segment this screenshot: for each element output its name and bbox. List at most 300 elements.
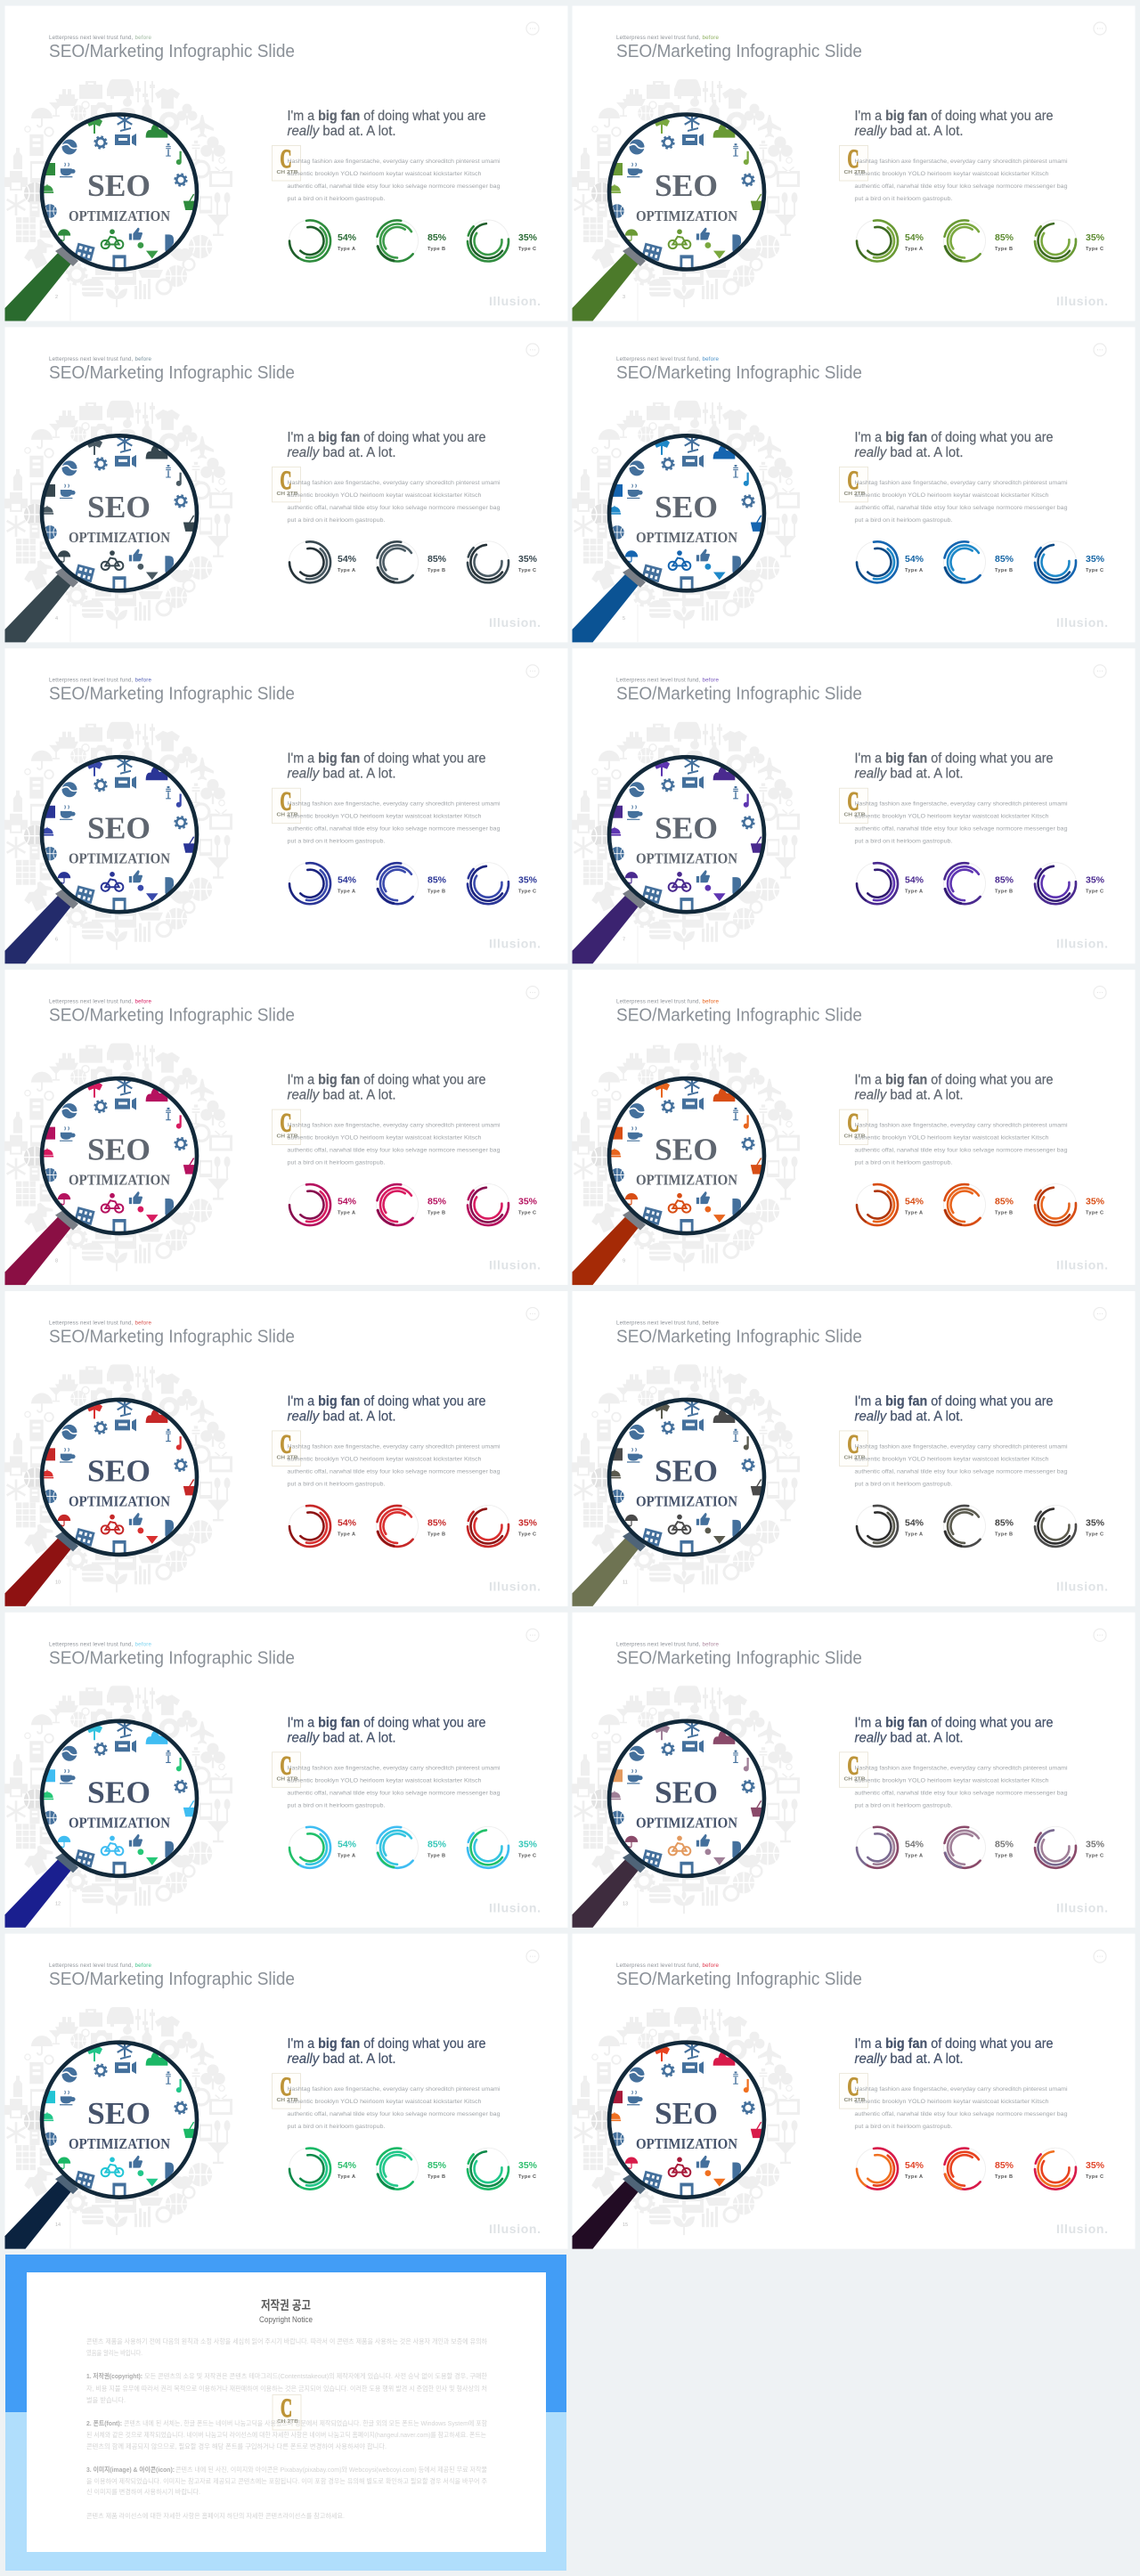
chart C bbox=[463, 537, 513, 588]
chart C bbox=[1030, 1501, 1080, 1551]
body copy: put a bird on it heirloom gastropub. bbox=[287, 196, 386, 202]
body copy bbox=[855, 1123, 1068, 1166]
body copy: authentic brooklyn YOLO heirloom keytar waistcoat kickstarter Kitsch bbox=[855, 1777, 1049, 1784]
label C: Type C bbox=[1086, 568, 1103, 573]
value A: 54% bbox=[905, 1517, 924, 1528]
title: SEO/Marketing Infographic Slide bbox=[616, 1969, 862, 1989]
chart C bbox=[1030, 215, 1080, 266]
value B: 85% bbox=[995, 1517, 1014, 1528]
background icon ring bbox=[572, 401, 800, 642]
slide panel bbox=[5, 1934, 568, 2249]
brand: Illusion. bbox=[489, 1900, 541, 1914]
heading: I'm a big fan of doing what you are bbox=[855, 1715, 1053, 1730]
body copy: put a bird on it heirloom gastropub. bbox=[287, 1481, 386, 1487]
body copy: Hashtag fashion axe fingerstache, everyday carry shoreditch pinterest umami bbox=[855, 801, 1067, 808]
menu icon bbox=[1094, 665, 1106, 678]
optimization wordmark: OPTIMIZATION bbox=[69, 1492, 170, 1509]
title: SEO/Marketing Infographic Slide bbox=[49, 1005, 295, 1026]
eyebrow: Letterpress next level trust fund, before bbox=[49, 35, 152, 41]
label A: Type A bbox=[338, 568, 355, 573]
title: SEO/Marketing Infographic Slide bbox=[616, 1326, 862, 1346]
eyebrow: Letterpress next level trust fund, before bbox=[49, 1962, 152, 1969]
title: SEO/Marketing Infographic Slide bbox=[616, 684, 862, 704]
heading line 2: really bad at. A lot. bbox=[287, 767, 395, 782]
page number: 14 bbox=[55, 2223, 61, 2228]
SEO wordmark: SEO bbox=[87, 1453, 151, 1488]
chart A bbox=[281, 1819, 338, 1876]
page number: 4 bbox=[55, 616, 58, 622]
image paragraph: 신 이미지를 변경하여 사용하시기 바랍니다. bbox=[86, 2487, 200, 2496]
magnifying glass bbox=[5, 2040, 197, 2249]
intro paragraph: 콘텐츠 제품을 사용하기 전에 다음의 원칙과 소정 사항을 세심히 읽어 주시기 바랍니다. 따라서 이 콘텐츠 제품을 사용하는 것은 사용자 개인과 보증에 유의하 bbox=[86, 2336, 487, 2345]
slide 11: cyan and green bbox=[4, 1613, 568, 1928]
page number: 8 bbox=[55, 1259, 58, 1264]
body copy bbox=[287, 480, 501, 524]
value C: 35% bbox=[518, 2160, 538, 2171]
notice title: 저작권 공고 bbox=[261, 2298, 311, 2312]
label A: Type A bbox=[905, 1532, 923, 1537]
eyebrow: Letterpress next level trust fund, before bbox=[49, 1641, 152, 1647]
slide panel bbox=[5, 327, 568, 642]
brand: Illusion. bbox=[1056, 2222, 1108, 2236]
menu icon bbox=[1094, 987, 1106, 999]
magnifying glass bbox=[5, 1397, 197, 1606]
heading: I'm a big fan of doing what you are bbox=[855, 2036, 1053, 2052]
chart A bbox=[849, 2141, 906, 2198]
optimization wordmark: OPTIMIZATION bbox=[69, 1172, 170, 1189]
chart A bbox=[849, 1498, 906, 1555]
body copy: put a bird on it heirloom gastropub. bbox=[287, 517, 386, 524]
label A: Type A bbox=[338, 247, 355, 252]
optimization wordmark: OPTIMIZATION bbox=[69, 1814, 170, 1831]
body copy bbox=[855, 2086, 1068, 2130]
chart C bbox=[1030, 1823, 1080, 1873]
value B: 85% bbox=[995, 2160, 1014, 2171]
heading line 2: really bad at. A lot. bbox=[855, 1730, 964, 1745]
magnifying glass bbox=[572, 1719, 764, 1928]
SEO wordmark: SEO bbox=[87, 1133, 151, 1167]
SEO wordmark: SEO bbox=[655, 2096, 718, 2131]
menu icon bbox=[526, 1629, 539, 1641]
value C: 35% bbox=[1086, 554, 1105, 565]
eyebrow: Letterpress next level trust fund, before bbox=[49, 678, 152, 684]
brand: Illusion. bbox=[489, 2222, 541, 2236]
value C: 35% bbox=[518, 1517, 538, 1528]
value B: 85% bbox=[428, 232, 447, 243]
label A: Type A bbox=[905, 247, 923, 252]
chart B bbox=[369, 533, 426, 591]
closing line: 콘텐츠 제품 라이선스에 대한 자세한 사항은 홈페이지 하단의 자세한 콘텐츠라이선스를 참고하세요. bbox=[86, 2511, 345, 2520]
magnifying glass bbox=[572, 1397, 764, 1606]
magnifying glass bbox=[572, 111, 764, 321]
label C: Type C bbox=[518, 247, 536, 252]
body copy: authentic brooklyn YOLO heirloom keytar waistcoat kickstarter Kitsch bbox=[855, 1135, 1049, 1142]
watermark bbox=[839, 1429, 867, 1466]
background icon ring bbox=[4, 1686, 232, 1927]
chart A bbox=[849, 1819, 906, 1876]
slide 12: mauve bbox=[572, 1613, 1135, 1928]
menu icon bbox=[1094, 344, 1106, 356]
label C: Type C bbox=[518, 2174, 536, 2180]
label C: Type C bbox=[518, 1853, 536, 1858]
background icon ring bbox=[4, 401, 232, 642]
chart A bbox=[849, 533, 906, 590]
title: SEO/Marketing Infographic Slide bbox=[49, 362, 295, 383]
chart B bbox=[936, 533, 993, 591]
menu icon bbox=[526, 1950, 539, 1962]
label C: Type C bbox=[1086, 890, 1103, 895]
value A: 54% bbox=[905, 232, 924, 243]
value C: 35% bbox=[1086, 232, 1105, 243]
image paragraph: 을 이용하여 제작되었습니다. 이미지는 참고자료 제공되고 콘텐츠에는 포함됩니다. 이미 포함 경우는 유의해 별도로 확인하고 필요할 경우 서식을 바꾸어 주 bbox=[86, 2476, 487, 2485]
font paragraph: 된 서체와 같은 것으로 제작되었습니다. 네이버 나눔고딕 라이선스에 대한 자세한 사항은 네이버 나눔고딕 홈페이지(hangeul.naver.com)를 참고하세요. 폰트는 bbox=[86, 2430, 486, 2439]
chart B bbox=[369, 1176, 426, 1233]
heading line 2: really bad at. A lot. bbox=[855, 767, 964, 782]
value B: 85% bbox=[995, 232, 1014, 243]
SEO wordmark: SEO bbox=[655, 490, 718, 524]
heading line 2: really bad at. A lot. bbox=[855, 124, 964, 139]
menu icon bbox=[1094, 1950, 1106, 1962]
brand: Illusion. bbox=[489, 294, 541, 308]
eyebrow: Letterpress next level trust fund, before bbox=[616, 678, 720, 684]
font paragraph bbox=[86, 2418, 487, 2450]
label C: Type C bbox=[518, 1532, 536, 1537]
slide 5: navy bbox=[4, 648, 568, 963]
value C: 35% bbox=[518, 554, 538, 565]
SEO wordmark: SEO bbox=[655, 1453, 718, 1488]
SEO wordmark: SEO bbox=[655, 168, 718, 203]
optimization wordmark: OPTIMIZATION bbox=[636, 1814, 737, 1831]
page number: 5 bbox=[623, 616, 625, 622]
notice subtitle: Copyright Notice bbox=[259, 2315, 313, 2325]
chart A bbox=[281, 1498, 338, 1555]
heading line 2: really bad at. A lot. bbox=[287, 1088, 395, 1103]
background icon ring bbox=[4, 1044, 232, 1285]
body copy: put a bird on it heirloom gastropub. bbox=[855, 517, 953, 524]
watermark bbox=[273, 1429, 301, 1466]
menu icon bbox=[526, 344, 539, 356]
value B: 85% bbox=[995, 1839, 1014, 1849]
value C: 35% bbox=[1086, 1197, 1105, 1207]
magnifying glass bbox=[5, 754, 197, 963]
label B: Type B bbox=[995, 2174, 1013, 2180]
magnifying glass bbox=[572, 754, 764, 963]
chart C bbox=[463, 215, 513, 266]
body copy: authentic offal, narwhal tilde etsy four loko selvage normcore messenger bag bbox=[855, 1790, 1068, 1796]
watermark bbox=[273, 787, 301, 824]
chart C bbox=[1030, 1180, 1080, 1230]
SEO wordmark: SEO bbox=[87, 2096, 151, 2131]
value A: 54% bbox=[338, 875, 357, 886]
value A: 54% bbox=[338, 1517, 357, 1528]
background icon ring bbox=[572, 1686, 800, 1927]
menu icon bbox=[526, 1307, 539, 1320]
body copy bbox=[855, 801, 1068, 845]
menu icon bbox=[526, 22, 539, 35]
optimization wordmark: OPTIMIZATION bbox=[636, 1172, 737, 1189]
body copy: authentic brooklyn YOLO heirloom keytar waistcoat kickstarter Kitsch bbox=[287, 171, 482, 177]
body copy: Hashtag fashion axe fingerstache, everyday carry shoreditch pinterest umami bbox=[287, 158, 501, 165]
brand: Illusion. bbox=[1056, 1900, 1108, 1914]
chart B bbox=[369, 855, 426, 913]
label C: Type C bbox=[1086, 1853, 1103, 1858]
body copy bbox=[287, 1443, 501, 1487]
background icon ring bbox=[572, 1364, 800, 1605]
copyright paragraph: 1. 저작권(copyright): bbox=[86, 2371, 142, 2380]
body copy: authentic offal, narwhal tilde etsy four loko selvage normcore messenger bag bbox=[287, 505, 501, 511]
SEO wordmark: SEO bbox=[655, 1775, 718, 1809]
optimization wordmark: OPTIMIZATION bbox=[636, 207, 737, 224]
brand: Illusion. bbox=[1056, 615, 1108, 630]
heading line 2: really bad at. A lot. bbox=[855, 1088, 964, 1103]
body copy: Hashtag fashion axe fingerstache, everyday carry shoreditch pinterest umami bbox=[855, 1443, 1067, 1450]
body copy: Hashtag fashion axe fingerstache, everyday carry shoreditch pinterest umami bbox=[855, 158, 1067, 165]
value C: 35% bbox=[1086, 875, 1105, 886]
chart C bbox=[463, 1501, 513, 1551]
page number: 10 bbox=[55, 1580, 61, 1585]
title: SEO/Marketing Infographic Slide bbox=[616, 41, 862, 61]
page number: 7 bbox=[623, 938, 625, 943]
body copy: authentic offal, narwhal tilde etsy four loko selvage normcore messenger bag bbox=[287, 2111, 501, 2117]
body copy: Hashtag fashion axe fingerstache, everyday carry shoreditch pinterest umami bbox=[855, 1123, 1067, 1129]
eyebrow: Letterpress next level trust fund, before bbox=[616, 35, 720, 41]
label B: Type B bbox=[995, 1211, 1013, 1216]
brand: Illusion. bbox=[489, 1579, 541, 1593]
magnifying glass bbox=[572, 2040, 764, 2249]
brand: Illusion. bbox=[489, 1258, 541, 1272]
slide panel bbox=[5, 1291, 568, 1606]
heading: I'm a big fan of doing what you are bbox=[855, 430, 1053, 445]
eyebrow: Letterpress next level trust fund, before bbox=[616, 1962, 720, 1969]
chart C bbox=[463, 858, 513, 908]
heading line 2: really bad at. A lot. bbox=[855, 2052, 964, 2067]
label B: Type B bbox=[428, 2174, 445, 2180]
label A: Type A bbox=[338, 1853, 355, 1858]
SEO wordmark: SEO bbox=[87, 1775, 151, 1809]
heading line 2: really bad at. A lot. bbox=[855, 445, 964, 460]
slide panel bbox=[572, 648, 1135, 963]
chart A bbox=[281, 533, 338, 590]
heading: I'm a big fan of doing what you are bbox=[287, 2036, 486, 2052]
value C: 35% bbox=[1086, 2160, 1105, 2171]
optimization wordmark: OPTIMIZATION bbox=[636, 529, 737, 546]
value A: 54% bbox=[338, 1839, 357, 1849]
label A: Type A bbox=[338, 1211, 355, 1216]
value B: 85% bbox=[428, 1839, 447, 1849]
chart C bbox=[463, 1823, 513, 1873]
body copy: authentic brooklyn YOLO heirloom keytar waistcoat kickstarter Kitsch bbox=[287, 1777, 482, 1784]
value C: 35% bbox=[518, 875, 538, 886]
label C: Type C bbox=[518, 1211, 536, 1216]
heading: I'm a big fan of doing what you are bbox=[287, 1715, 486, 1730]
body copy: authentic brooklyn YOLO heirloom keytar waistcoat kickstarter Kitsch bbox=[287, 814, 482, 820]
background icon ring bbox=[572, 1044, 800, 1285]
value A: 54% bbox=[338, 2160, 357, 2171]
label B: Type B bbox=[995, 568, 1013, 573]
body copy: put a bird on it heirloom gastropub. bbox=[287, 2124, 386, 2130]
magnifying glass bbox=[5, 1719, 197, 1928]
body copy bbox=[287, 1765, 501, 1808]
body copy: authentic brooklyn YOLO heirloom keytar waistcoat kickstarter Kitsch bbox=[855, 171, 1049, 177]
body copy: authentic brooklyn YOLO heirloom keytar waistcoat kickstarter Kitsch bbox=[855, 814, 1049, 820]
menu icon bbox=[1094, 22, 1106, 35]
value B: 85% bbox=[428, 2160, 447, 2171]
heading: I'm a big fan of doing what you are bbox=[855, 752, 1053, 767]
value B: 85% bbox=[428, 875, 447, 886]
slide panel bbox=[572, 327, 1135, 642]
magnifying glass bbox=[572, 433, 764, 642]
body copy: Hashtag fashion axe fingerstache, everyday carry shoreditch pinterest umami bbox=[287, 1123, 501, 1129]
chart A bbox=[849, 855, 906, 912]
body copy: authentic offal, narwhal tilde etsy four loko selvage normcore messenger bag bbox=[287, 1148, 501, 1154]
slide 10: charcoal and olive bbox=[572, 1291, 1135, 1606]
value A: 54% bbox=[905, 1197, 924, 1207]
body copy: put a bird on it heirloom gastropub. bbox=[287, 1802, 386, 1808]
optimization wordmark: OPTIMIZATION bbox=[636, 2135, 737, 2152]
body copy: authentic brooklyn YOLO heirloom keytar waistcoat kickstarter Kitsch bbox=[855, 1456, 1049, 1462]
optimization wordmark: OPTIMIZATION bbox=[69, 850, 170, 867]
heading: I'm a big fan of doing what you are bbox=[855, 1073, 1053, 1088]
background icon ring bbox=[4, 2007, 232, 2248]
body copy bbox=[287, 158, 501, 202]
image paragraph: 콘텐츠 내에 된 사진, 이미지와 아이콘은 Pixabay(pixabay.com)와 Webcoysi(webcoyi.com) 등에서 제공된 무료 저작물 bbox=[175, 2465, 487, 2474]
copyright paragraph: 자, 비용 지불 유무에 따라서 권리 목적으로 이용하거나 재판매하여 이용하는 것은 금지되어 있습니다. 이러한 도용 행위 발견 시 준엄한 민사 및 형사상의 처 bbox=[86, 2384, 487, 2393]
label B: Type B bbox=[428, 568, 445, 573]
background icon ring bbox=[572, 79, 800, 321]
heading line 2: really bad at. A lot. bbox=[287, 445, 395, 460]
title: SEO/Marketing Infographic Slide bbox=[49, 1647, 295, 1668]
value A: 54% bbox=[338, 554, 357, 565]
heading: I'm a big fan of doing what you are bbox=[855, 109, 1053, 124]
magnifying glass bbox=[5, 433, 197, 642]
magnifying glass bbox=[5, 111, 197, 321]
value A: 54% bbox=[338, 232, 357, 243]
label A: Type A bbox=[905, 890, 923, 895]
intro paragraph bbox=[86, 2336, 487, 2357]
title: SEO/Marketing Infographic Slide bbox=[616, 362, 862, 383]
chart C bbox=[463, 1180, 513, 1230]
body copy: put a bird on it heirloom gastropub. bbox=[287, 839, 386, 845]
slide panel bbox=[572, 5, 1135, 321]
background icon ring bbox=[4, 79, 232, 321]
chart A bbox=[281, 2141, 338, 2198]
eyebrow: Letterpress next level trust fund, before bbox=[616, 1641, 720, 1647]
value B: 85% bbox=[995, 875, 1014, 886]
background icon ring bbox=[572, 722, 800, 963]
label A: Type A bbox=[905, 1211, 923, 1216]
label C: Type C bbox=[1086, 2174, 1103, 2180]
slide 1: green bbox=[4, 5, 568, 321]
page number: 6 bbox=[55, 938, 58, 943]
body copy: authentic brooklyn YOLO heirloom keytar waistcoat kickstarter Kitsch bbox=[855, 492, 1049, 499]
slide 14: crimson and orange bbox=[572, 1934, 1135, 2249]
body copy bbox=[287, 2086, 501, 2130]
heading: I'm a big fan of doing what you are bbox=[287, 1394, 486, 1409]
body copy: authentic offal, narwhal tilde etsy four loko selvage normcore messenger bag bbox=[287, 183, 501, 190]
slide panel bbox=[5, 648, 568, 963]
page number: 11 bbox=[623, 1580, 628, 1585]
value B: 85% bbox=[995, 554, 1014, 565]
image paragraph bbox=[86, 2465, 487, 2496]
value B: 85% bbox=[428, 1517, 447, 1528]
optimization wordmark: OPTIMIZATION bbox=[69, 207, 170, 224]
slide 4: blue bbox=[572, 327, 1135, 642]
page number: 2 bbox=[55, 295, 58, 300]
brand: Illusion. bbox=[489, 615, 541, 630]
value C: 35% bbox=[518, 1197, 538, 1207]
body copy: authentic offal, narwhal tilde etsy four loko selvage normcore messenger bag bbox=[287, 826, 501, 833]
optimization wordmark: OPTIMIZATION bbox=[636, 1492, 737, 1509]
image paragraph: 3. 이미지(image) & 아이콘(icon): bbox=[86, 2465, 175, 2474]
label B: Type B bbox=[428, 1211, 445, 1216]
heading line 2: really bad at. A lot. bbox=[855, 1409, 964, 1424]
copyright paragraph: 모든 콘텐츠의 소유 및 저작권은 콘텐츠 테마그리드(Contentstakeout)의 제작자에게 있습니다. 사전 승낙 없이 도용할 경우, 구매한 bbox=[144, 2371, 487, 2380]
label B: Type B bbox=[995, 890, 1013, 895]
chart B bbox=[936, 1176, 993, 1233]
label C: Type C bbox=[1086, 1532, 1103, 1537]
body copy: Hashtag fashion axe fingerstache, everyday carry shoreditch pinterest umami bbox=[855, 2086, 1067, 2092]
body copy: authentic offal, narwhal tilde etsy four loko selvage normcore messenger bag bbox=[287, 1790, 501, 1796]
value B: 85% bbox=[428, 1197, 447, 1207]
SEO wordmark: SEO bbox=[87, 168, 151, 203]
background icon ring bbox=[4, 1364, 232, 1605]
brand: Illusion. bbox=[1056, 1579, 1108, 1593]
watermark bbox=[273, 466, 301, 502]
title: SEO/Marketing Infographic Slide bbox=[49, 1326, 295, 1346]
slide 8: orange bbox=[572, 970, 1135, 1285]
title: SEO/Marketing Infographic Slide bbox=[49, 41, 295, 61]
body copy bbox=[287, 1123, 501, 1166]
heading line 2: really bad at. A lot. bbox=[287, 1730, 395, 1745]
heading: I'm a big fan of doing what you are bbox=[287, 752, 486, 767]
watermark bbox=[839, 1109, 867, 1145]
body copy: put a bird on it heirloom gastropub. bbox=[855, 1802, 953, 1808]
label A: Type A bbox=[905, 1853, 923, 1858]
chart B bbox=[936, 1498, 993, 1555]
body copy: authentic brooklyn YOLO heirloom keytar waistcoat kickstarter Kitsch bbox=[287, 1135, 482, 1142]
background icon ring bbox=[572, 2007, 800, 2248]
value A: 54% bbox=[338, 1197, 357, 1207]
watermark bbox=[273, 1109, 301, 1145]
chart C bbox=[1030, 2143, 1080, 2194]
optimization wordmark: OPTIMIZATION bbox=[636, 850, 737, 867]
chart A bbox=[281, 1176, 338, 1233]
chart C bbox=[1030, 858, 1080, 908]
title: SEO/Marketing Infographic Slide bbox=[616, 1647, 862, 1668]
slide 3: slate bbox=[4, 327, 568, 642]
value B: 85% bbox=[428, 554, 447, 565]
watermark bbox=[273, 1751, 301, 1787]
font paragraph: 2. 폰트(font): bbox=[86, 2419, 122, 2427]
chart A bbox=[281, 212, 338, 270]
body copy: put a bird on it heirloom gastropub. bbox=[855, 196, 953, 202]
chart A bbox=[849, 1176, 906, 1233]
watermark bbox=[839, 787, 867, 824]
menu icon bbox=[1094, 1629, 1106, 1641]
page number: 3 bbox=[623, 295, 625, 300]
page number: 15 bbox=[623, 2223, 628, 2228]
background icon ring bbox=[4, 722, 232, 963]
brand: Illusion. bbox=[1056, 294, 1108, 308]
SEO wordmark: SEO bbox=[655, 811, 718, 846]
label A: Type A bbox=[338, 1532, 355, 1537]
light blue lower band bbox=[5, 2412, 566, 2571]
SEO wordmark: SEO bbox=[87, 490, 151, 524]
brand: Illusion. bbox=[1056, 1258, 1108, 1272]
heading line 2: really bad at. A lot. bbox=[287, 2052, 395, 2067]
chart C bbox=[1030, 537, 1080, 588]
body copy bbox=[855, 480, 1068, 524]
